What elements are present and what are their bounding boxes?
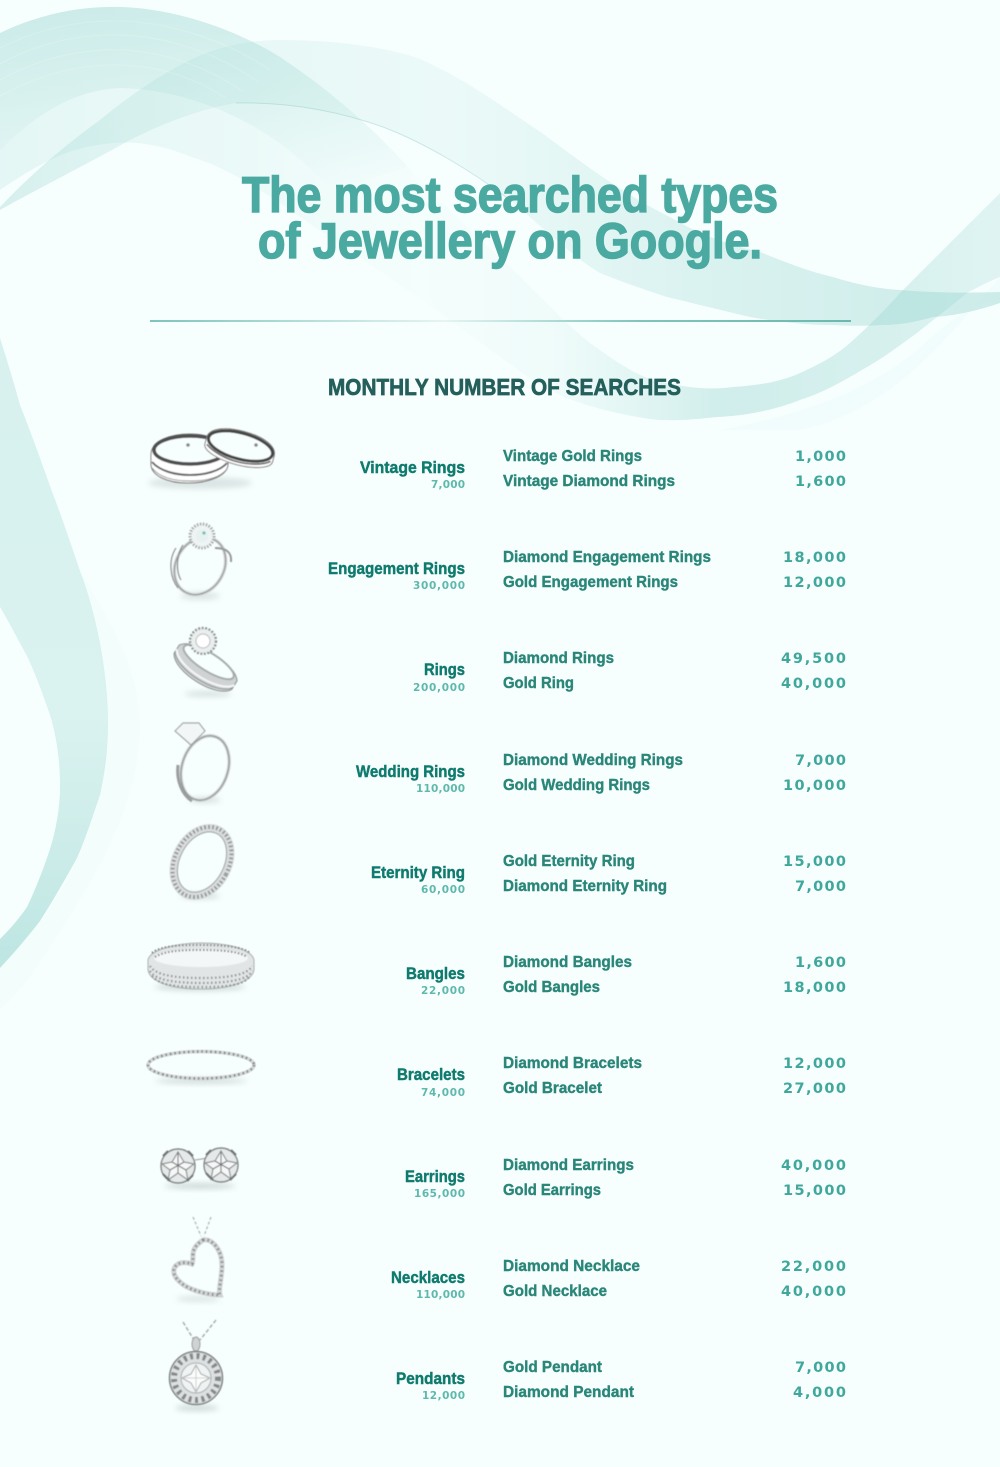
row: bangles: Gold Bangles — [503, 979, 600, 996]
icon: bracelet — [148, 1052, 254, 1084]
row: engagement rings: 12,000 — [783, 575, 846, 591]
row: pendants: 4,000 — [793, 1385, 846, 1401]
row: bracelets: Gold Bracelet — [503, 1080, 603, 1097]
row: wedding rings — [356, 752, 846, 795]
row: engagement rings — [328, 549, 846, 592]
row: bangles: 18,000 — [783, 980, 846, 996]
divider line — [150, 320, 851, 322]
row: engagement rings: 300,000 — [413, 580, 465, 592]
row: vintage rings — [360, 448, 846, 491]
row: engagement rings: Engagement Rings — [328, 559, 465, 578]
row: earrings: Diamond Earrings — [503, 1157, 634, 1174]
row: bracelets — [397, 1055, 846, 1099]
icon: bangle — [148, 943, 254, 991]
row: pendants — [396, 1359, 846, 1402]
row: rings: 200,000 — [413, 682, 465, 694]
row: rings: 40,000 — [781, 676, 846, 692]
row: vintage rings: 1,600 — [795, 474, 846, 490]
row: pendants: 7,000 — [795, 1360, 846, 1376]
row: pendants: Pendants — [396, 1369, 465, 1388]
row: eternity ring — [371, 853, 846, 896]
row: engagement rings: Diamond Engagement Rings — [503, 549, 711, 566]
row: earrings — [405, 1157, 846, 1200]
row: rings: Diamond Rings — [503, 650, 614, 667]
row: bracelets: 12,000 — [783, 1056, 846, 1072]
row: earrings: 15,000 — [783, 1183, 846, 1199]
row: bangles: 22,000 — [421, 985, 465, 997]
icon: engagement ring — [164, 524, 236, 604]
row: necklaces: 22,000 — [781, 1259, 846, 1275]
row: bangles — [406, 954, 846, 997]
row: eternity ring: Gold Eternity Ring — [503, 853, 635, 870]
row: vintage rings: 7,000 — [431, 479, 465, 491]
row: engagement rings: Gold Engagement Rings — [503, 574, 678, 591]
row: bangles: 1,600 — [795, 955, 846, 971]
row: rings: Gold Ring — [503, 675, 574, 692]
row: pendants: Gold Pendant — [503, 1359, 603, 1376]
row: earrings: 40,000 — [781, 1158, 846, 1174]
row: bracelets: 74,000 — [421, 1087, 465, 1099]
background waves: top ribbons — [0, 7, 1000, 430]
row: necklaces: Gold Necklace — [503, 1283, 607, 1300]
row: vintage rings: Vintage Rings — [360, 458, 465, 477]
row: eternity ring: Diamond Eternity Ring — [503, 878, 667, 895]
row: vintage rings: Vintage Diamond Rings — [503, 473, 675, 490]
row: necklaces: Necklaces — [391, 1268, 465, 1287]
row: bangles: Bangles — [406, 964, 465, 983]
row: engagement rings: 18,000 — [783, 550, 846, 566]
row: pendants: Diamond Pendant — [503, 1384, 635, 1401]
row: wedding rings: 110,000 — [416, 783, 465, 795]
icon: diamond pendant — [170, 1320, 222, 1411]
row: eternity ring: 7,000 — [795, 879, 846, 895]
icon: vintage rings — [148, 423, 278, 489]
row: eternity ring: 15,000 — [783, 854, 846, 870]
row: wedding rings: 10,000 — [783, 778, 846, 794]
row: bracelets: Bracelets — [397, 1065, 465, 1084]
row: earrings: 165,000 — [414, 1188, 465, 1200]
row: necklaces — [391, 1258, 846, 1301]
row: necklaces: 40,000 — [781, 1284, 846, 1300]
icon: diamond stud earrings — [161, 1148, 238, 1189]
title — [242, 167, 778, 269]
icon: ring with stacked bands — [168, 628, 243, 700]
background waves: left ribbon — [0, 338, 140, 1010]
row: eternity ring: 60,000 — [421, 884, 465, 896]
row: necklaces: 110,000 — [416, 1289, 465, 1301]
row: vintage rings: Vintage Gold Rings — [503, 448, 642, 465]
row: wedding rings: 7,000 — [795, 753, 846, 769]
row: rings — [413, 650, 846, 694]
row: necklaces: Diamond Necklace — [503, 1258, 640, 1275]
row: rings: 49,500 — [781, 651, 846, 667]
title: The most searched types — [242, 167, 778, 223]
heading: monthly number of searches: MONTHLY NUMBER OF SEARCHES — [328, 374, 681, 400]
row: earrings: Earrings — [405, 1167, 465, 1186]
row: wedding rings: Wedding Rings — [356, 762, 465, 781]
icon: heart necklace — [174, 1217, 222, 1302]
row: vintage rings: 1,000 — [795, 449, 846, 465]
icon: eternity ring — [161, 817, 243, 907]
title: of Jewellery on Google. — [258, 213, 762, 269]
row: eternity ring: Eternity Ring — [371, 863, 465, 882]
row: bracelets: 27,000 — [783, 1081, 846, 1097]
row: wedding rings: Diamond Wedding Rings — [503, 752, 683, 769]
icon: wedding ring with solitaire — [173, 723, 237, 806]
row: bracelets: Diamond Bracelets — [503, 1055, 642, 1072]
row: bangles: Diamond Bangles — [503, 954, 632, 971]
row: rings: Rings — [424, 660, 465, 679]
row: pendants: 12,000 — [422, 1390, 465, 1402]
row: wedding rings: Gold Wedding Rings — [503, 777, 650, 794]
row: earrings: Gold Earrings — [503, 1182, 601, 1199]
